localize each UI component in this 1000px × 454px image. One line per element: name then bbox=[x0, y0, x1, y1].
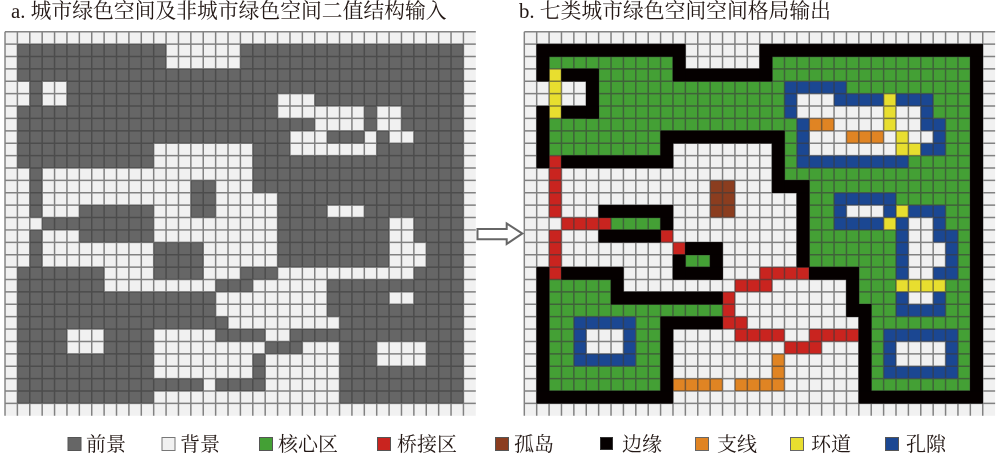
legend: background bbox=[162, 433, 220, 454]
panel a: binary foreground/background grid bbox=[5, 32, 476, 416]
islet (brown) bbox=[710, 180, 735, 218]
perforations (blue) bbox=[574, 81, 958, 379]
title: panel a: a. 城市绿色空间及非城市绿色空间二值结构输入 bbox=[11, 0, 447, 23]
arrow: input to output bbox=[478, 224, 522, 244]
legend: loop bbox=[790, 433, 851, 454]
loops (yellow) bbox=[549, 69, 946, 292]
legend: foreground bbox=[68, 433, 126, 454]
title: panel b: b. 七类城市绿色空间空间格局输出 bbox=[519, 0, 831, 23]
legend: branch bbox=[696, 433, 757, 454]
panel b: seven-class spatial pattern grid bbox=[524, 32, 995, 416]
legend: perforation bbox=[886, 433, 947, 454]
core areas (green) bbox=[549, 56, 970, 391]
bridges (red) bbox=[549, 156, 859, 354]
branches (orange) bbox=[673, 118, 884, 391]
legend: edge bbox=[600, 433, 662, 454]
legend: islet bbox=[496, 433, 554, 454]
edges (black) bbox=[537, 44, 983, 403]
legend bbox=[68, 433, 947, 454]
